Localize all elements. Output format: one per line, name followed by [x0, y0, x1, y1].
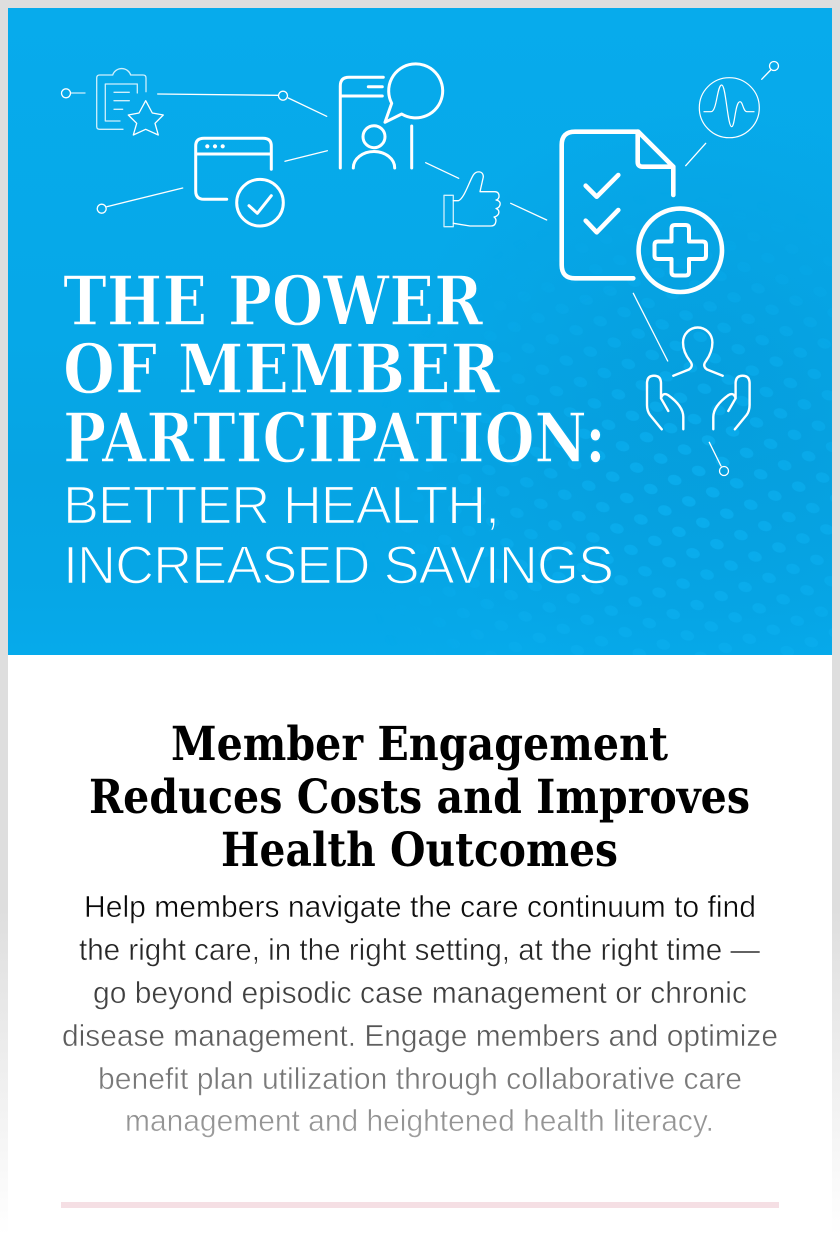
body text	[62, 890, 778, 1138]
subtitle: BETTER HEALTH,	[63, 476, 500, 536]
body text: go beyond episodic case management or chronic	[93, 976, 747, 1010]
subtitle: INCREASED SAVINGS	[63, 536, 614, 596]
icon: pulse circle	[699, 78, 759, 138]
white content card	[8, 655, 832, 1260]
icon: thumbs up	[444, 172, 500, 227]
body text: benefit plan utilization through collaborative care	[98, 1062, 742, 1096]
title: OF MEMBER	[63, 330, 500, 410]
connector lines and nodes	[97, 62, 778, 476]
icon: clipboard with star	[62, 69, 163, 135]
section heading: Reduces Costs and Improves	[89, 770, 750, 825]
pink divider	[61, 1202, 779, 1208]
section heading: Health Outcomes	[221, 823, 618, 878]
title: PARTICIPATION:	[63, 399, 606, 479]
panel: blue header	[8, 8, 832, 655]
title	[63, 262, 606, 479]
section heading: Member Engagement	[171, 717, 668, 772]
subtitle	[63, 476, 614, 596]
section heading	[89, 717, 750, 878]
icon: person with caring hands	[647, 328, 750, 429]
body text: management and heightened health literacy.	[125, 1104, 714, 1138]
body text: disease management. Engage members and optimize	[62, 1019, 778, 1053]
icon: phone with person and speech bubble	[340, 64, 443, 168]
icon: browser window with check	[196, 138, 283, 226]
icon: document with checklist and medical cross	[562, 132, 722, 292]
body text: the right care, in the right setting, at the right time —	[79, 933, 760, 967]
body text: Help members navigate the care continuum to find	[84, 890, 756, 924]
title: THE POWER	[63, 262, 483, 342]
